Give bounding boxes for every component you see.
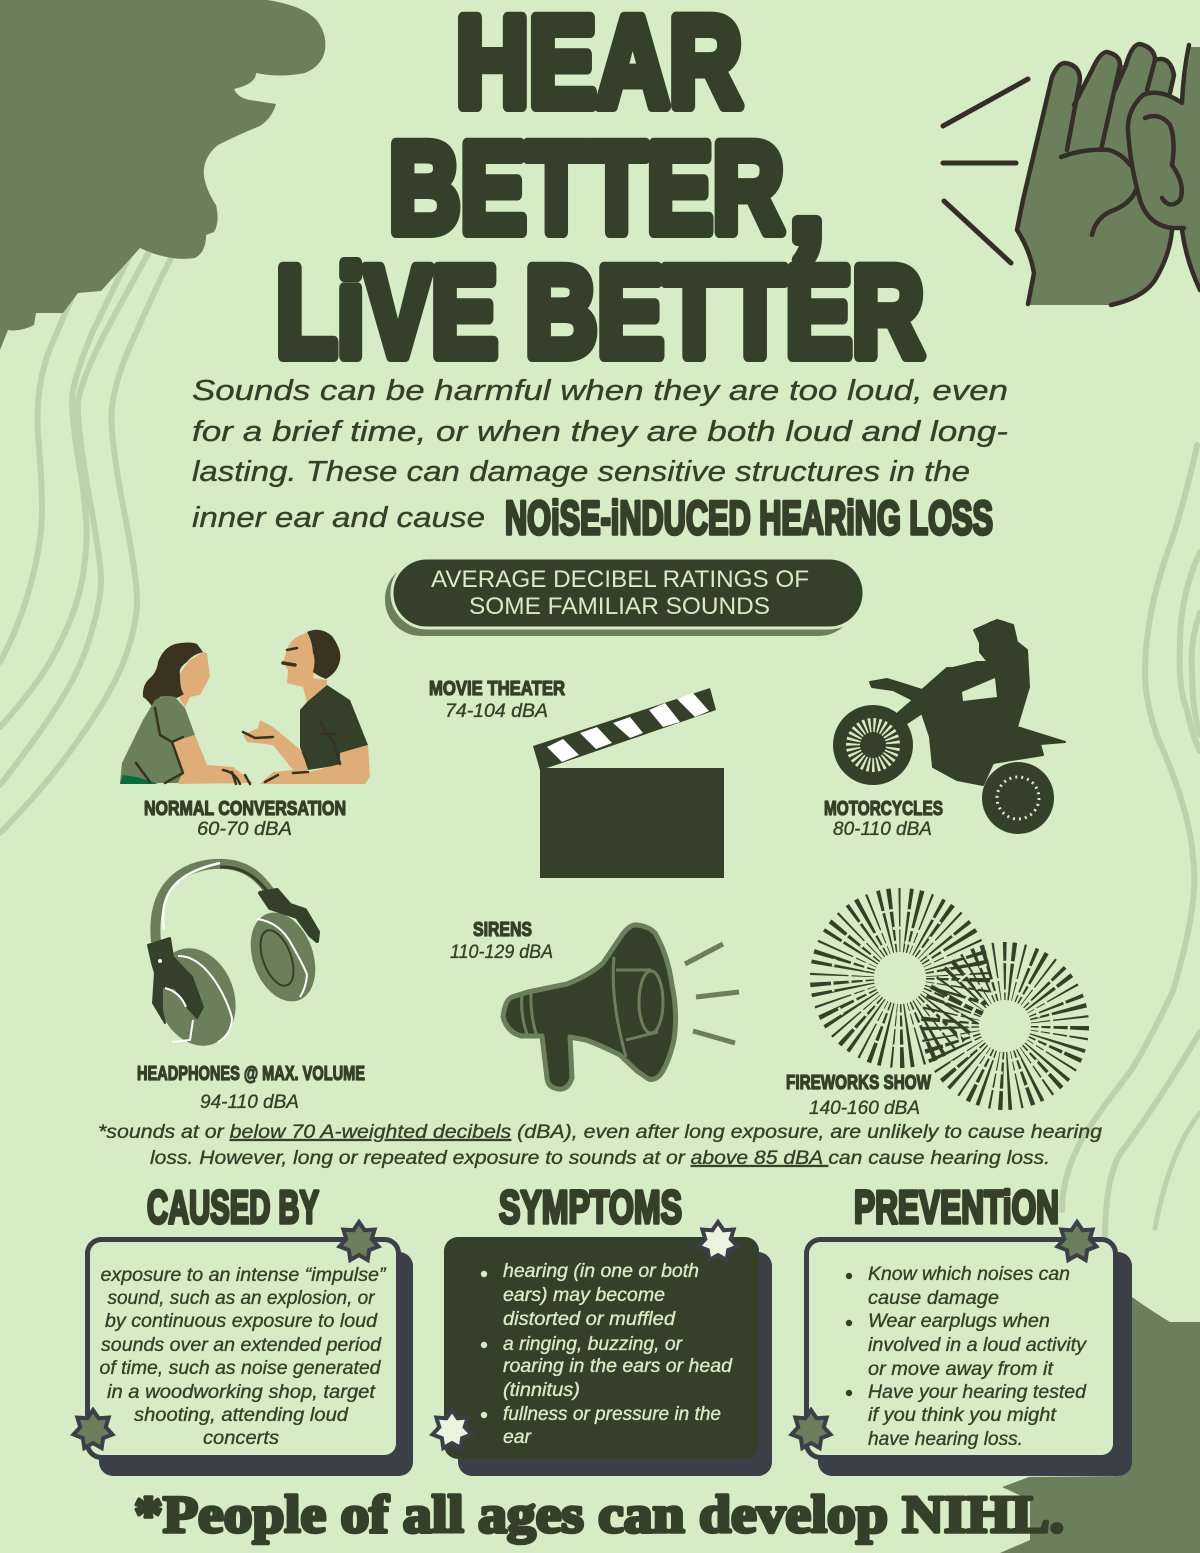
heading: caused by: CAUSED BY bbox=[147, 1181, 319, 1233]
icon: motorcycle bbox=[833, 620, 1065, 834]
panel: symptoms: a ringing, buzzing, or bbox=[503, 1333, 683, 1355]
panel: caused by: in a woodworking shop, target bbox=[107, 1381, 377, 1403]
panel: caused by bbox=[74, 1222, 413, 1476]
intro text: Sounds can be harmful when they are too loud, even bbox=[192, 375, 1008, 407]
label: motorcycles: 80-110 dBA bbox=[833, 819, 932, 840]
icon: headphones bbox=[143, 863, 327, 1057]
panel: symptoms: ears) may become bbox=[503, 1284, 665, 1306]
title bbox=[276, 0, 924, 384]
title: , bbox=[789, 125, 825, 268]
panel: caused by: sound, such as an explosion, or bbox=[108, 1287, 376, 1309]
label: movie theater: MOVIE THEATER bbox=[429, 678, 565, 700]
icon: megaphone bbox=[503, 925, 739, 1089]
label: sirens: SIRENS bbox=[473, 919, 532, 941]
panel: caused by: exposure to an intense “impulse” bbox=[100, 1264, 387, 1286]
label: movie theater: 74-104 dBA bbox=[445, 701, 548, 722]
panel: caused by: by continuous exposure to loud bbox=[105, 1310, 378, 1332]
panel: prevention: or move away from it bbox=[868, 1358, 1055, 1380]
panel: symptoms: roaring in the ears or head bbox=[503, 1355, 733, 1377]
label: movie theater bbox=[429, 678, 565, 722]
panel: symptoms: hearing (in one or both bbox=[503, 1260, 699, 1282]
label: headphones at max volume: HEADPHONES @ MAX. VOLUME bbox=[137, 1063, 365, 1085]
decorative streaks: left bbox=[0, 250, 175, 833]
icon: hand cupped to ear bbox=[943, 44, 1200, 305]
panel: symptoms: ear bbox=[503, 1426, 532, 1448]
heading: symptoms: SYMPTOMS bbox=[499, 1181, 682, 1233]
panel: prevention: have hearing loss. bbox=[868, 1428, 1023, 1450]
intro text: for a brief time, or when they are both loud and long- bbox=[192, 416, 1008, 448]
panel: caused by: sounds over an extended period bbox=[101, 1334, 382, 1356]
label: motorcycles bbox=[824, 798, 943, 840]
footnote text: loss. However, long or repeated exposure to sounds at or above 85 dBA can cause hearing loss. bbox=[150, 1147, 1050, 1169]
intro text: inner ear and cause bbox=[192, 502, 485, 534]
heading: prevention: PREVENTiON bbox=[854, 1181, 1059, 1233]
pill: average decibel ratings: AVERAGE DECIBEL RATINGS OF bbox=[431, 566, 809, 593]
pill: average decibel ratings bbox=[385, 558, 864, 636]
decorative streaks: right bbox=[1062, 445, 1200, 1240]
label: fireworks show bbox=[786, 1072, 931, 1119]
panel: prevention: if you think you might bbox=[868, 1404, 1058, 1426]
label: headphones at max volume: 94-110 dBA bbox=[200, 1092, 299, 1113]
panel: prevention: Know which noises can bbox=[868, 1263, 1070, 1285]
panel: caused by: concerts bbox=[203, 1427, 279, 1449]
label: fireworks show: FIREWORKS SHOW bbox=[786, 1072, 931, 1094]
footer callout: *People of all ages can develop NIHL. bbox=[134, 1486, 1064, 1544]
panel: symptoms bbox=[432, 1222, 772, 1476]
pill: average decibel ratings: SOME FAMILIAR SOUNDS bbox=[469, 593, 770, 620]
label: sirens bbox=[450, 919, 553, 963]
panel: symptoms: (tinnitus) bbox=[503, 1379, 580, 1401]
panel: symptoms: fullness or pressure in the bbox=[503, 1403, 721, 1425]
title: LiVE BETTER bbox=[276, 241, 924, 384]
panel: caused by: of time, such as noise generated bbox=[100, 1357, 382, 1379]
title: BETTER bbox=[389, 117, 784, 260]
panel: caused by: shooting, attending loud bbox=[134, 1404, 349, 1426]
label: sirens: 110-129 dBA bbox=[450, 942, 553, 963]
label: headphones at max volume bbox=[137, 1063, 365, 1113]
panel: symptoms: distorted or muffled bbox=[503, 1308, 676, 1330]
label: normal conversation bbox=[144, 798, 346, 840]
footnote text bbox=[98, 1121, 1102, 1169]
panel: prevention: Have your hearing tested bbox=[868, 1381, 1087, 1403]
label: fireworks show: 140-160 dBA bbox=[809, 1098, 920, 1119]
panel: prevention: involved in a loud activity bbox=[868, 1334, 1087, 1356]
panel: prevention: Wear earplugs when bbox=[868, 1310, 1050, 1332]
intro text bbox=[192, 375, 1008, 534]
label: normal conversation: 60-70 dBA bbox=[197, 819, 292, 840]
blob: bottom right bbox=[1000, 1297, 1200, 1553]
label: normal conversation: NORMAL CONVERSATION bbox=[144, 798, 346, 820]
blob: top left bbox=[0, 0, 325, 350]
footnote text: *sounds at or below 70 A-weighted decibels (dBA), even after long exposure, are unlikely to cause hearing bbox=[98, 1121, 1102, 1143]
label: motorcycles: MOTORCYCLES bbox=[824, 798, 943, 820]
panel: prevention bbox=[792, 1222, 1132, 1476]
illustration: people talking bbox=[120, 630, 370, 784]
icon: clapperboard bbox=[533, 688, 724, 878]
intro text: lasting. These can damage sensitive structures in the bbox=[192, 456, 970, 488]
icon: fireworks bbox=[832, 910, 1069, 1090]
panel: prevention: cause damage bbox=[868, 1287, 999, 1309]
